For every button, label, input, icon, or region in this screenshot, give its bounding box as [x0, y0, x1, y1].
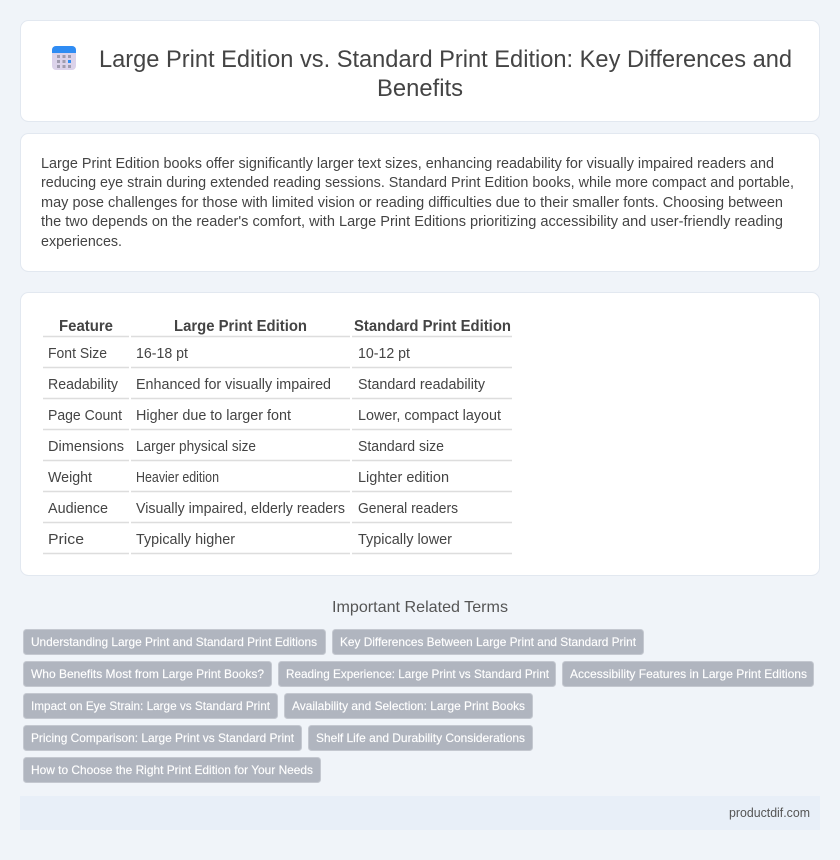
tag [284, 694, 532, 718]
text block: description: reducing eye strain during extended reading sessions. Standard Print Edition books, while more compact and portable, [41, 175, 794, 191]
row: price: Typically lower [358, 532, 452, 548]
tag [24, 758, 320, 782]
text block: description: the two depends on the reader's comfort, with Large Print Editions prioritizing accessibility and user-friendly reading [41, 214, 783, 230]
table header: Feature [59, 318, 113, 335]
tag [24, 726, 302, 750]
tag [278, 662, 556, 686]
row: page count [48, 408, 501, 424]
text block: description: may pose challenges for those with limited vision or reading difficulties due to their smaller fonts. Choosing between [41, 195, 783, 211]
row: audience: Audience [48, 501, 108, 517]
text block: description [41, 156, 794, 250]
tag: Reading Experience: Large Print vs Standard Print [286, 667, 550, 681]
tag [24, 694, 278, 718]
row: readability: Readability [48, 377, 119, 393]
table header: Large Print Edition [174, 318, 307, 335]
tag [562, 662, 814, 686]
tag: Availability and Selection: Large Print Books [292, 699, 525, 713]
row: readability: Enhanced for visually impaired [136, 377, 331, 393]
row: page count: Page Count [48, 408, 122, 424]
tag [308, 726, 532, 750]
text block: description: Large Print Edition books offer significantly larger text sizes, enhancing readability for visually impaired readers and [41, 156, 774, 172]
row: dimensions: Standard size [358, 439, 444, 455]
row: weight [48, 470, 449, 486]
tag: Pricing Comparison: Large Print vs Standard Print [31, 731, 295, 745]
row: font size [48, 346, 410, 362]
title [99, 46, 792, 102]
row: weight: Heavier edition [136, 470, 219, 486]
text block: description: experiences. [41, 234, 122, 250]
row: audience: General readers [358, 501, 458, 517]
row: weight: Weight [48, 470, 92, 486]
tag: Impact on Eye Strain: Large vs Standard Print [31, 699, 271, 713]
panel: header [20, 20, 820, 122]
row: dimensions [48, 439, 444, 455]
footer [20, 796, 820, 830]
panel: related term tags [24, 630, 814, 782]
row: page count: Lower, compact layout [358, 408, 501, 424]
row: weight: Lighter edition [358, 470, 449, 486]
row: audience [48, 501, 458, 517]
title: Large Print Edition vs. Standard Print Edition: Key Differences and [99, 46, 792, 73]
row: price: Typically higher [136, 532, 235, 548]
tag: Shelf Life and Durability Considerations [316, 731, 525, 745]
panel: comparison table [20, 292, 820, 576]
row: readability: Standard readability [358, 377, 486, 393]
footer: productdif.com [729, 806, 810, 820]
tag: Who Benefits Most from Large Print Books? [31, 667, 264, 681]
row: font size: 10-12 pt [358, 346, 410, 362]
title: Benefits [377, 75, 463, 102]
tag: Accessibility Features in Large Print Editions [570, 667, 807, 681]
tag [332, 630, 644, 654]
row: price [48, 532, 452, 548]
tag: Key Differences Between Large Print and Standard Print [340, 635, 637, 649]
row: readability [48, 377, 486, 393]
row: page count: Higher due to larger font [136, 408, 291, 424]
row: dimensions: Dimensions [48, 439, 124, 455]
icon: calendar [52, 46, 76, 70]
tag [24, 662, 272, 686]
tag: Understanding Large Print and Standard Print Editions [31, 635, 317, 649]
heading: related terms: Important Related Terms [332, 599, 508, 616]
table header: Standard Print Edition [354, 318, 511, 335]
row: audience: Visually impaired, elderly readers [136, 501, 345, 517]
tag: How to Choose the Right Print Edition for Your Needs [31, 763, 313, 777]
panel: description [20, 134, 820, 272]
table header [59, 318, 511, 335]
row: font size: Font Size [48, 346, 107, 362]
row: font size: 16-18 pt [136, 346, 188, 362]
row: dimensions: Larger physical size [136, 439, 256, 455]
row: price: Price [48, 532, 84, 548]
tag [24, 630, 326, 654]
